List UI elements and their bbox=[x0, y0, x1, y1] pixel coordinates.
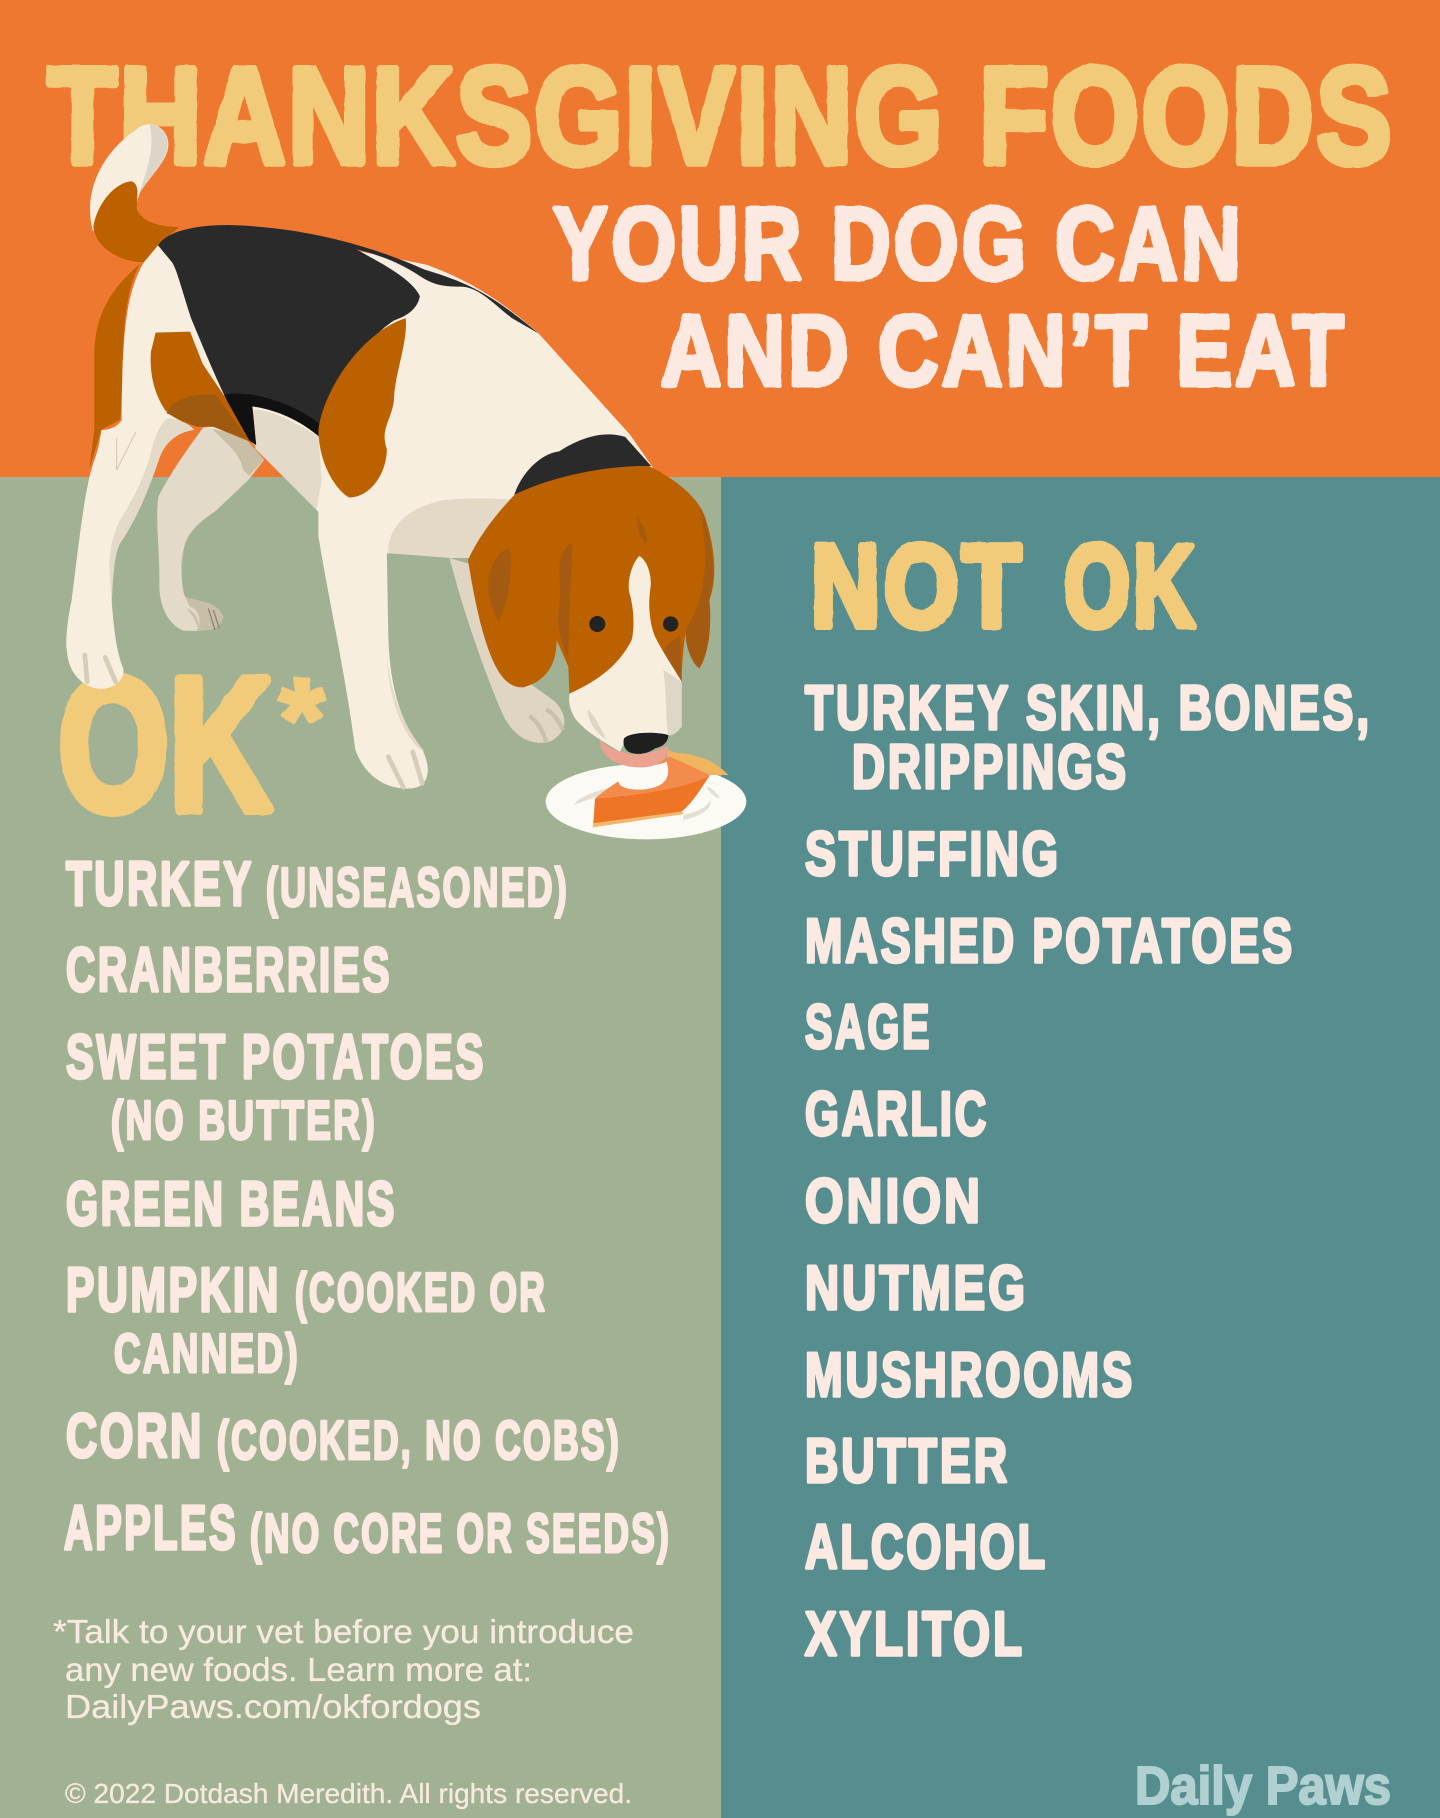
saddle lower dark edge bbox=[224, 394, 319, 445]
pumpkin pie slice bbox=[593, 750, 728, 827]
list: not OK foods: MUSHROOMS bbox=[805, 1341, 1135, 1410]
list: OK foods: (UNSEASONED) bbox=[266, 856, 569, 918]
front leg shadow bbox=[387, 657, 425, 752]
list: OK foods: GREEN BEANS bbox=[66, 1170, 397, 1239]
list: OK foods: SWEET POTATOES bbox=[66, 1023, 486, 1092]
heading: NOT OK: OK bbox=[1064, 521, 1198, 651]
footnote: DailyPaws.com/okfordogs bbox=[65, 1688, 481, 1725]
nose bbox=[624, 733, 668, 754]
heading: OK: * bbox=[279, 656, 326, 783]
brown thigh patch bbox=[151, 332, 250, 442]
brown flank patch bbox=[318, 318, 406, 497]
list: not OK foods: BUTTER bbox=[805, 1427, 1010, 1496]
footnote: any new foods. Learn more at: bbox=[65, 1651, 532, 1688]
logo: Daily Paws: Daily Paws bbox=[1135, 1756, 1391, 1816]
heading: OK: OK bbox=[58, 639, 272, 851]
list: OK foods: (COOKED, NO COBS) bbox=[217, 1409, 621, 1471]
list: OK foods: PUMPKIN bbox=[66, 1256, 281, 1325]
paw toes bbox=[85, 655, 422, 787]
far front leg bbox=[450, 558, 564, 743]
body and front leg bbox=[123, 225, 653, 789]
muzzle shadow bbox=[587, 670, 682, 740]
panel: not OK foods background bbox=[721, 477, 1440, 1818]
black saddle bbox=[158, 225, 539, 445]
collar bbox=[514, 434, 651, 495]
list: OK foods: (NO CORE OR SEEDS) bbox=[250, 1502, 671, 1564]
tail bbox=[90, 124, 179, 262]
inner body shadow bbox=[253, 410, 322, 510]
footnote bbox=[53, 1613, 634, 1725]
near rear leg bbox=[66, 360, 167, 689]
list: not OK foods: ONION bbox=[805, 1167, 983, 1236]
heading: NOT OK: NOT bbox=[811, 521, 1025, 651]
footnote: *Talk to your vet before you introduce bbox=[53, 1613, 634, 1650]
brown rear-leg edge bbox=[90, 264, 140, 468]
list: OK foods: CORN bbox=[66, 1402, 204, 1471]
list: OK foods: CANNED) bbox=[114, 1322, 300, 1384]
list: not OK foods: GARLIC bbox=[805, 1080, 989, 1149]
leg scratch lines bbox=[117, 432, 136, 470]
far rear leg bbox=[157, 427, 264, 631]
illustration: beagle eating pie bbox=[66, 124, 746, 839]
near rear leg shadow bbox=[109, 418, 194, 607]
list: not OK foods: SAGE bbox=[805, 993, 932, 1062]
whipped cream bbox=[617, 762, 668, 790]
far paw toes bbox=[529, 709, 563, 742]
heading: NOT OK bbox=[811, 521, 1198, 651]
list: OK foods: (COOKED OR bbox=[295, 1261, 547, 1323]
list: not OK foods: STUFFING bbox=[805, 820, 1061, 889]
eyes bbox=[589, 616, 678, 632]
white blaze and muzzle bbox=[569, 556, 682, 752]
belly shadow bbox=[388, 498, 517, 558]
brown head and ears bbox=[468, 466, 714, 693]
list: not OK foods: XYLITOL bbox=[805, 1600, 1025, 1669]
plate bbox=[546, 764, 746, 839]
list: OK foods: (NO BUTTER) bbox=[111, 1089, 377, 1151]
copyright: © 2022 Dotdash Meredith. All rights reserved. bbox=[65, 1778, 632, 1809]
subtitle: your dog can and can't eat bbox=[553, 186, 1347, 407]
list: not OK foods: NUTMEG bbox=[805, 1254, 1028, 1323]
subtitle: your dog can and can't eat: YOUR DOG CAN bbox=[553, 186, 1244, 301]
list: OK foods: CRANBERRIES bbox=[66, 936, 392, 1005]
panel: orange header background bbox=[0, 0, 1440, 477]
tongue bbox=[600, 740, 669, 767]
panel: OK foods background bbox=[0, 477, 721, 1818]
head bbox=[468, 466, 746, 839]
list: not OK foods: ALCOHOL bbox=[805, 1513, 1048, 1582]
ear shading bbox=[488, 507, 713, 682]
list: OK foods: TURKEY bbox=[66, 850, 254, 919]
list: OK foods: APPLES bbox=[64, 1494, 238, 1563]
list: OK foods bbox=[64, 850, 671, 1564]
list: not OK foods bbox=[805, 674, 1372, 1669]
list: not OK foods: DRIPPINGS bbox=[852, 733, 1129, 802]
